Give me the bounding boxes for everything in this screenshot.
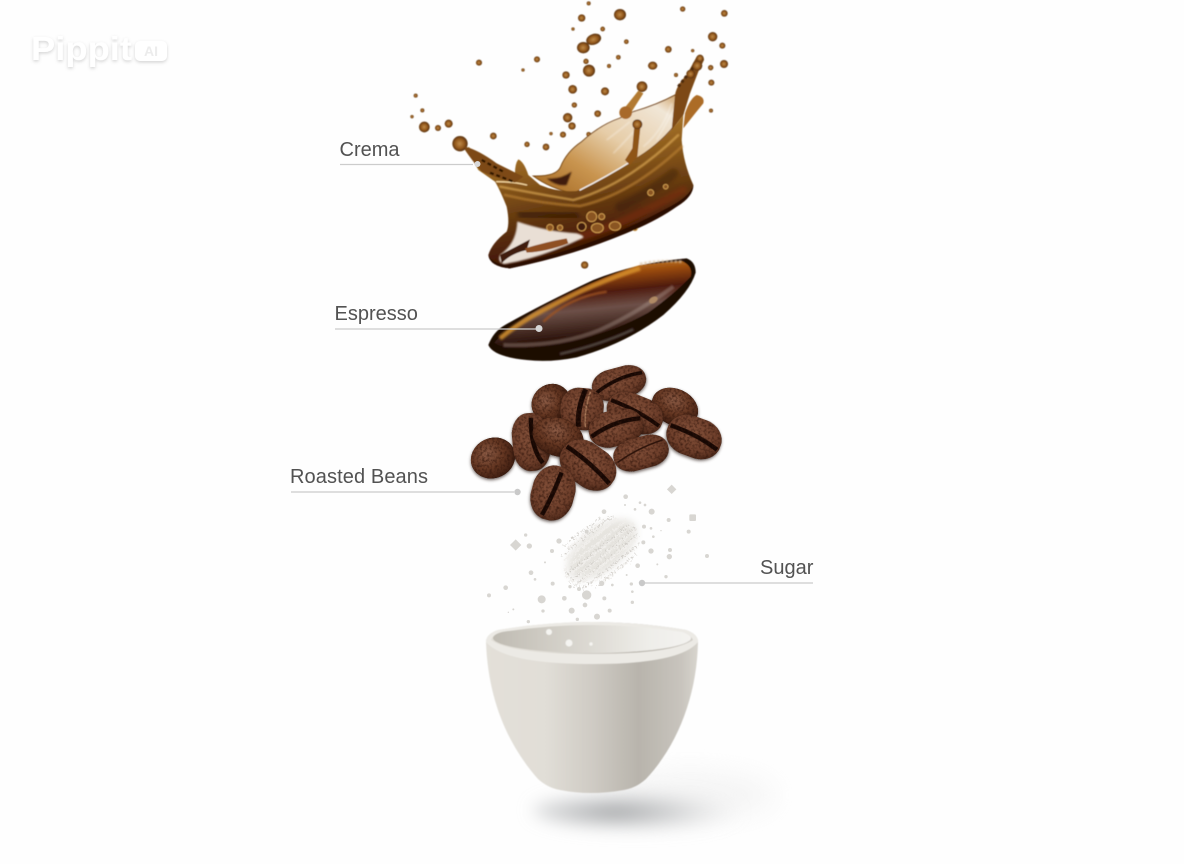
espresso highlights bbox=[500, 261, 683, 354]
bean far-left bbox=[464, 430, 522, 486]
illustration: coffee splash crema bbox=[410, 1, 728, 269]
illustration: floating sugar bbox=[487, 485, 709, 623]
bean upper-right bbox=[601, 385, 669, 441]
flying droplets bbox=[410, 1, 728, 269]
left crown spike bbox=[452, 136, 523, 183]
cup inner bbox=[493, 623, 691, 653]
label: Crema bbox=[340, 139, 480, 167]
bean back top bbox=[588, 361, 650, 405]
illustration: white ceramic cup bbox=[486, 622, 698, 793]
bean centre flat bbox=[585, 404, 647, 452]
illustration: roasted beans pile bbox=[464, 361, 727, 525]
label: Roasted Beans bbox=[290, 466, 521, 495]
espresso dark shell bbox=[488, 258, 696, 361]
cup body bbox=[486, 622, 698, 793]
sugar cluster base bbox=[557, 508, 646, 591]
right crown spikes bbox=[672, 55, 704, 130]
label: Sugar bbox=[639, 557, 814, 586]
crown inner wall bbox=[533, 95, 683, 193]
middle crown spikes bbox=[619, 81, 647, 165]
illustration: espresso layer bbox=[488, 258, 696, 361]
label: Roasted Beans: Roasted Beans bbox=[290, 466, 428, 488]
espresso surface bbox=[494, 261, 691, 348]
bubbles bbox=[547, 184, 668, 233]
bean bottom bbox=[525, 461, 581, 525]
pale pool in crown base bbox=[499, 222, 583, 264]
bean plain back-left bbox=[524, 376, 578, 430]
sugar cluster grains bbox=[547, 497, 657, 608]
label: Sugar: Sugar bbox=[760, 557, 814, 579]
bean plain centre bbox=[527, 411, 589, 463]
watermark: Pippit AI logo bbox=[31, 30, 167, 67]
watermark: Pippit AI logo: AI bbox=[144, 43, 158, 59]
bean plain back-right bbox=[646, 381, 704, 433]
watermark: Pippit AI logo: Pippit bbox=[31, 30, 132, 67]
sugar scattered grains bbox=[487, 485, 709, 623]
label: Espresso: Espresso bbox=[334, 303, 418, 325]
illustration: cup shadow bbox=[532, 771, 775, 831]
label: Crema: Crema bbox=[340, 139, 400, 161]
cup rim lip bbox=[486, 622, 698, 664]
crown front body bbox=[468, 115, 693, 268]
dark outer edge of base bbox=[488, 185, 693, 268]
label: Espresso bbox=[334, 303, 542, 332]
sugar falling in cup bbox=[546, 629, 593, 646]
bean lower-centre bbox=[551, 431, 625, 499]
bean far-right bbox=[661, 409, 727, 465]
bean lower-right bbox=[610, 430, 672, 476]
bean left upright bbox=[510, 411, 552, 473]
bean back-centre bbox=[559, 386, 605, 432]
rim streaks and body shading bbox=[497, 135, 683, 237]
